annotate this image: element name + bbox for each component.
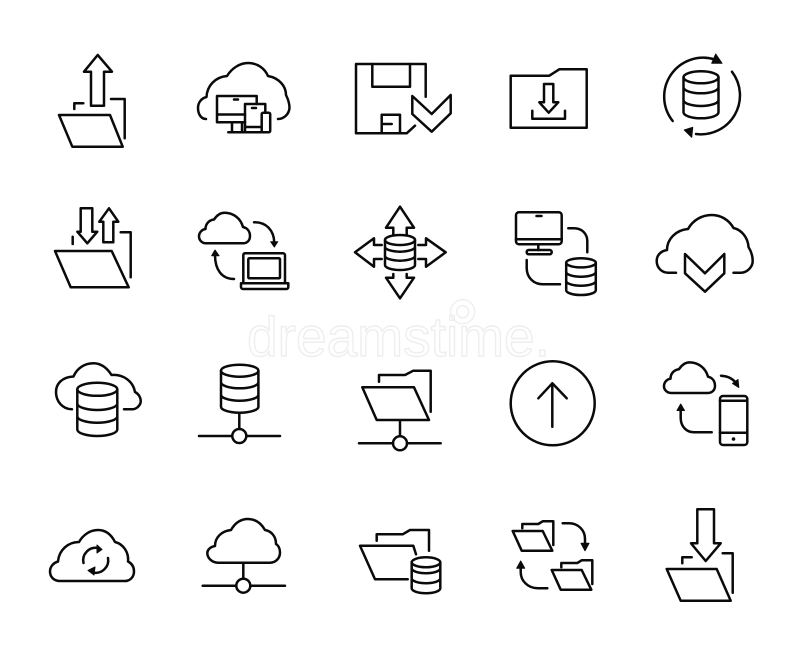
database (221, 365, 258, 377)
cloud (199, 213, 250, 243)
icon: cloud and laptop exchange (199, 213, 288, 289)
cloud (198, 63, 290, 119)
icon: cloud with database (56, 363, 141, 436)
icon: folder with upload arrow (59, 55, 125, 147)
icon: cloud with chevron (657, 215, 753, 292)
icon: folder with download (511, 69, 587, 128)
database (412, 557, 440, 567)
icon: floppy disk with chevron (356, 64, 451, 133)
download arrow (539, 84, 558, 113)
download arrow (691, 509, 721, 561)
transfer arrows (681, 376, 736, 432)
sync arrows (83, 548, 108, 573)
transfer arrows (215, 222, 274, 279)
icon: cloud on network (203, 519, 285, 593)
four-way arrows (386, 207, 414, 235)
down arrow (77, 208, 97, 243)
database (77, 383, 117, 396)
cloud (657, 215, 753, 273)
folder (667, 569, 731, 601)
folder (59, 115, 123, 147)
cloud (50, 530, 134, 581)
network node (203, 563, 285, 586)
up arrow (99, 208, 118, 242)
network node (199, 413, 280, 436)
network node (359, 421, 441, 443)
floppy disk (356, 64, 426, 133)
icon: database with sync arrows (664, 54, 740, 137)
folder (362, 387, 429, 420)
tablet (245, 104, 265, 132)
icon: monitor and database exchange (516, 212, 596, 295)
icon: folder with download arrow (667, 509, 733, 601)
watermark: dreamstime. (247, 305, 550, 368)
icon: folder on network (359, 371, 441, 450)
cloud (56, 363, 141, 409)
icon: two folders exchange (513, 521, 592, 590)
phone (720, 396, 747, 445)
lower folder (552, 560, 592, 590)
database (566, 258, 596, 267)
laptop (241, 253, 288, 289)
phone (262, 113, 270, 132)
folder (55, 251, 129, 287)
chevron (412, 95, 451, 132)
rotating arrows (664, 58, 740, 134)
icon: folder with database (360, 530, 440, 593)
folder outline (511, 69, 587, 128)
chevron (685, 254, 724, 292)
database (385, 235, 415, 245)
desktop monitor (217, 96, 257, 132)
transfer arrows (521, 523, 585, 588)
cloud (207, 519, 280, 563)
folder (360, 546, 416, 579)
cloud (664, 362, 715, 393)
upload arrow (84, 55, 112, 106)
upper folder (513, 521, 553, 551)
icon: cloud with devices (198, 63, 290, 132)
database (684, 71, 718, 118)
icon: circle with up arrow (511, 361, 595, 445)
monitor (516, 212, 562, 244)
connectors (527, 228, 587, 284)
icon: cloud and phone exchange (664, 362, 747, 445)
icon: folder with up and down arrows (55, 208, 131, 287)
icon: database on network (199, 365, 280, 443)
up arrow (538, 383, 567, 427)
icon: database with four arrows (355, 207, 446, 298)
icon: cloud with sync (50, 530, 134, 581)
